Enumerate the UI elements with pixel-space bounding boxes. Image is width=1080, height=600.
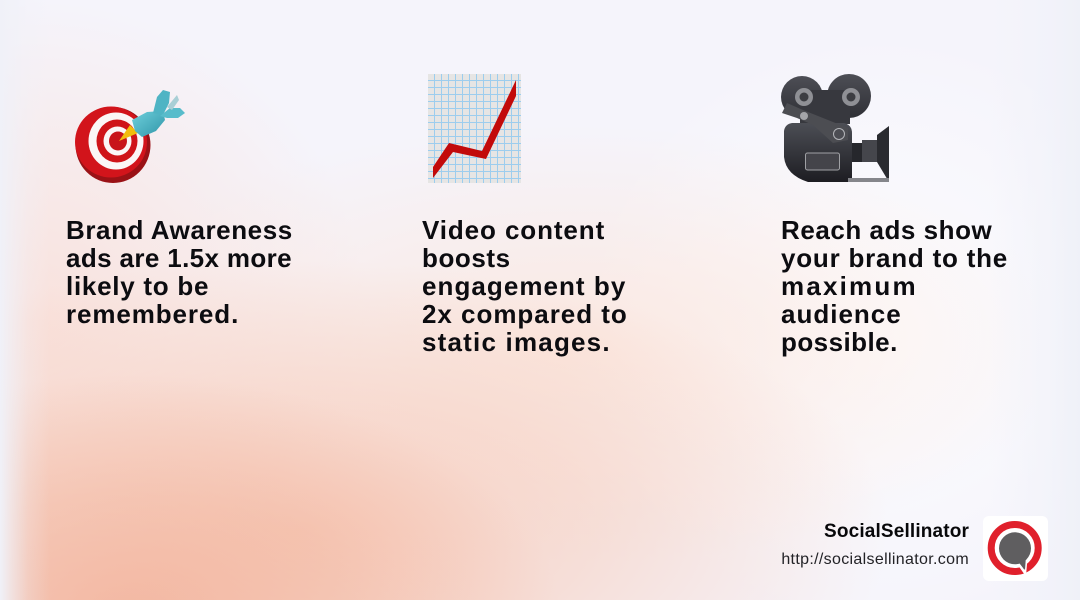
- text: reach ads: your brand to the: [781, 243, 1008, 273]
- text: video content: boosts: [422, 243, 511, 273]
- icon: target with dart: [75, 90, 185, 183]
- text: brand awareness: remembered.: [66, 299, 239, 329]
- text: video content: 2x compared to: [422, 299, 628, 329]
- text: video content: engagement by: [422, 271, 626, 301]
- text: brand awareness: [66, 215, 293, 329]
- text: brand awareness: ads are 1.5x more: [66, 243, 292, 273]
- website url: http://socialsellinator.com: [781, 551, 969, 568]
- logo: [983, 516, 1048, 581]
- icon: chart increasing: [428, 74, 521, 183]
- brand name: SocialSellinator: [824, 521, 969, 542]
- text: reach ads: Reach ads show: [781, 215, 992, 245]
- text: reach ads: possible.: [781, 327, 898, 357]
- text: video content: static images.: [422, 327, 611, 357]
- icon: movie camera: [781, 74, 889, 182]
- text: brand awareness: likely to be: [66, 271, 209, 301]
- text: reach ads: audience: [781, 299, 902, 329]
- text: video content: [422, 215, 628, 357]
- text: brand awareness: Brand Awareness: [66, 215, 293, 245]
- text: video content: Video content: [422, 215, 605, 245]
- text: reach ads: maximum: [781, 271, 918, 301]
- text: reach ads: [781, 215, 1008, 357]
